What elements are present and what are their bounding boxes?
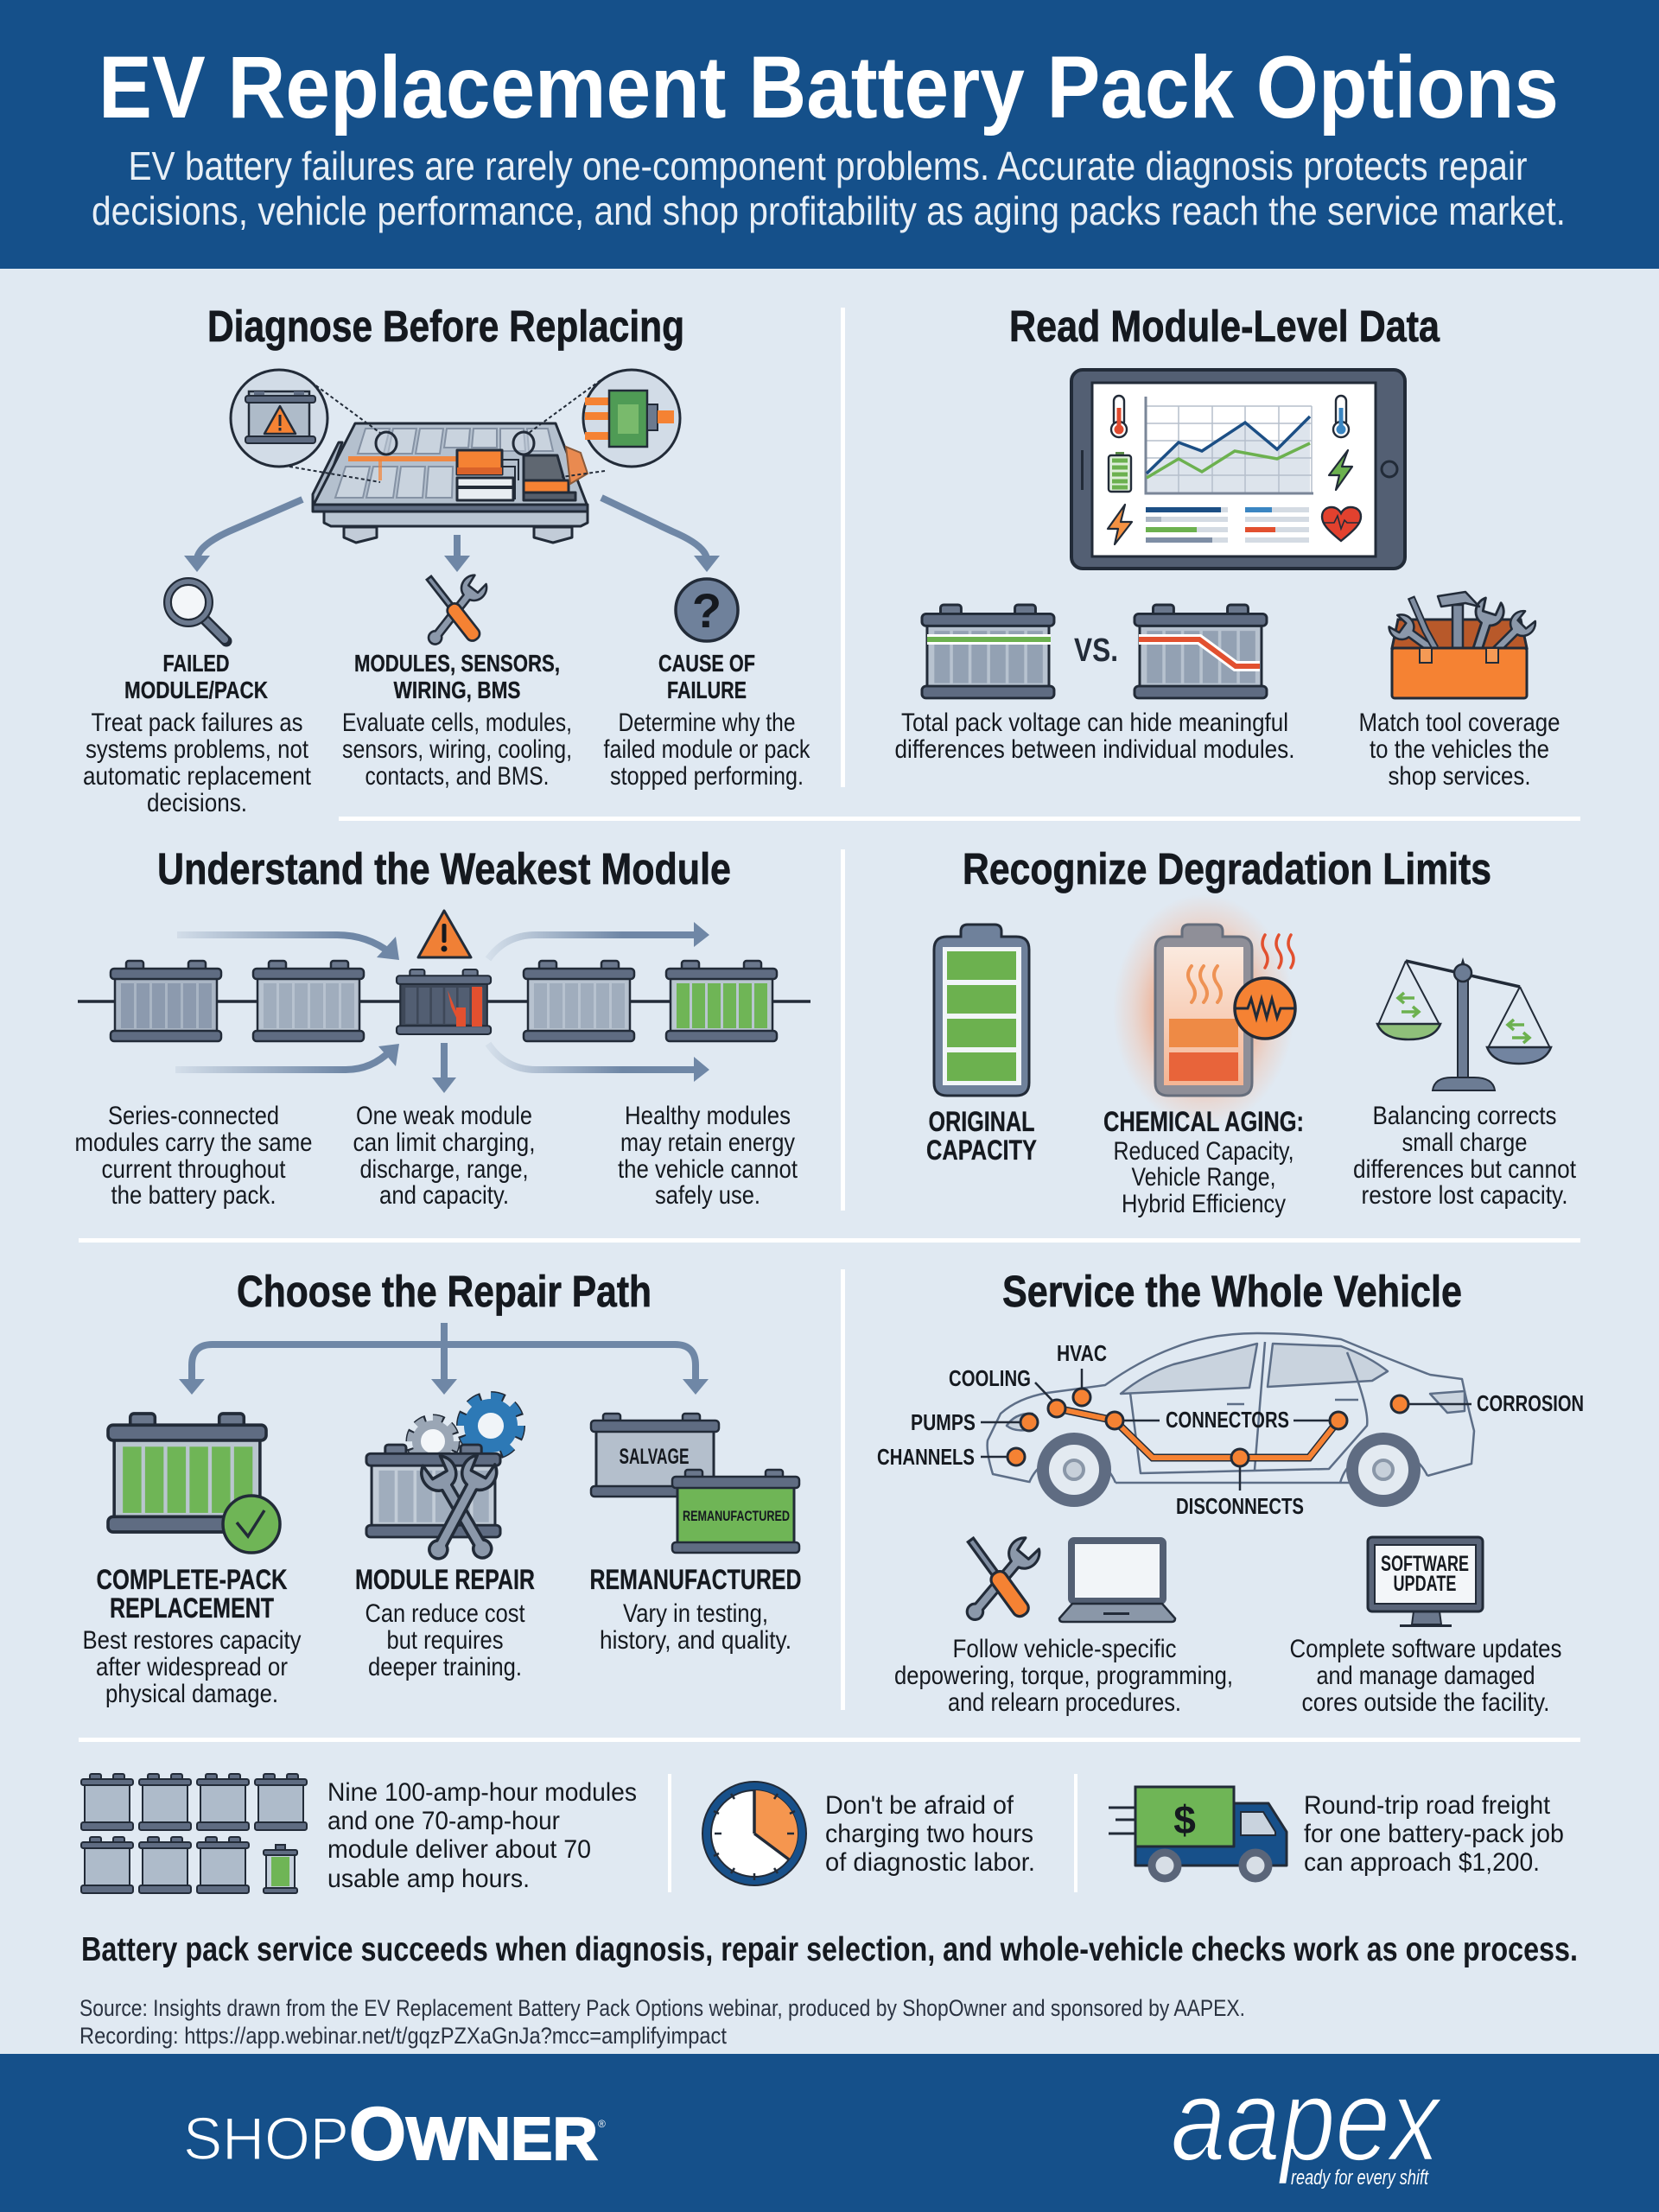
text: remanufactured: Vary in testing,	[623, 1599, 768, 1628]
text: vehicle-specific procedures: depowering, torque, programming,	[894, 1662, 1233, 1690]
text: pack voltage: differences between individual modules.	[895, 735, 1294, 764]
text: vehicle-specific procedures: and relearn procedures.	[948, 1688, 1181, 1717]
text: complete-pack replacement: REPLACEMENT	[110, 1592, 274, 1624]
icon: laptop	[1059, 1541, 1175, 1622]
text: chemical aging	[1103, 1106, 1304, 1218]
text: balancing: small charge	[1402, 1128, 1528, 1157]
weak module	[397, 969, 491, 1034]
item: cause of failure: failed module or pack	[603, 735, 810, 764]
text: chemical aging: Hybrid Efficiency	[1122, 1190, 1286, 1218]
text: software updates	[1289, 1635, 1562, 1717]
heading: weakest module: Understand the Weakest Module	[157, 844, 731, 893]
icon: complete replacement battery with check	[108, 1414, 280, 1553]
item: failed module/pack: decisions.	[147, 789, 247, 817]
icon: freight truck: $	[1173, 1797, 1196, 1842]
logo: shopowner	[183, 2093, 606, 2176]
icon: module repair	[366, 1397, 519, 1566]
text: healthy modules: Healthy modules	[625, 1102, 791, 1130]
text: diagnostic labor	[825, 1791, 1035, 1877]
item: cause of failure: FAILURE	[667, 677, 747, 703]
icon: software update monitor: SOFTWARE	[1381, 1552, 1469, 1576]
text: diagnostic labor: Don't be afraid of	[825, 1791, 1014, 1820]
icon: salvage and remanufactured batteries: REMANUFACTURED	[683, 1508, 790, 1524]
text: series-connected: Series-connected	[108, 1102, 279, 1130]
callout labels	[877, 1340, 1584, 1519]
icon: clock	[702, 1782, 806, 1885]
panel: read module-level data	[895, 302, 1560, 791]
text: module repair: deeper training.	[368, 1653, 522, 1681]
item: failed module/pack: FAILED	[162, 650, 230, 677]
item: modules, sensors, wiring, bms: WIRING, BMS	[394, 677, 520, 703]
icon: crossed tools	[422, 572, 490, 651]
panel: diagnose before replacing	[83, 302, 810, 817]
car body	[988, 1333, 1474, 1483]
footer band	[0, 2054, 1659, 2212]
callout labels: PUMPS	[911, 1409, 976, 1435]
heading: whole vehicle: Service the Whole Vehicle	[1002, 1267, 1462, 1316]
text: road freight: can approach $1,200.	[1304, 1848, 1540, 1877]
icon: heart	[1322, 507, 1361, 541]
item: failed module/pack: automatic replacement	[83, 762, 312, 791]
text: healthy modules: the vehicle cannot	[618, 1155, 798, 1184]
text: complete-pack replacement: after widespread or	[96, 1653, 288, 1681]
text: series-connected: current throughout	[102, 1155, 286, 1184]
text: one weak module: can limit charging,	[353, 1128, 536, 1157]
subtitle	[92, 143, 1566, 233]
source note: Source: Insights drawn from the EV Replacement Battery Pack Options webinar, produced by ShopOwner and sponsored by AAPEX.	[79, 1995, 1245, 2021]
text: complete-pack replacement: COMPLETE-PACK	[97, 1564, 287, 1595]
icon: software update monitor: UPDATE	[1393, 1572, 1457, 1596]
text: road freight: Round-trip road freight	[1304, 1791, 1551, 1820]
callout labels: COOLING	[949, 1365, 1031, 1391]
current flow arrows	[175, 922, 709, 1093]
leader lines	[981, 1369, 1471, 1491]
text: module repair	[355, 1564, 535, 1681]
text: usable amp hours: Nine 100-amp-hour modules	[327, 1778, 637, 1807]
icon: toolbox	[1386, 592, 1539, 698]
logo: aapex: aapex	[1171, 2055, 1443, 2185]
text: remanufactured: history, and quality.	[600, 1626, 791, 1655]
icon: blue thermometer	[1333, 396, 1349, 437]
text: remanufactured	[589, 1564, 802, 1655]
battery pack illustration	[231, 370, 680, 543]
gray modules and green module	[111, 961, 777, 1041]
text: tool coverage	[1358, 709, 1560, 791]
callout labels: HVAC	[1057, 1340, 1107, 1366]
source note	[79, 1995, 1245, 2049]
text: one weak module: One weak module	[356, 1102, 532, 1130]
text: one weak module	[353, 1102, 536, 1210]
text: series-connected: the battery pack.	[111, 1181, 276, 1210]
header band	[0, 0, 1659, 269]
text: healthy modules: may retain energy	[620, 1128, 795, 1157]
label: original capacity: ORIGINAL	[928, 1106, 1035, 1137]
item: failed module/pack: systems problems, not	[86, 735, 309, 764]
label: original capacity: CAPACITY	[926, 1135, 1037, 1166]
title: EV Replacement Battery Pack Options	[99, 38, 1559, 137]
text: series-connected: modules carry the same	[74, 1128, 313, 1157]
logo: shopowner: O	[349, 2093, 406, 2176]
source note: Recording: https://app.webinar.net/t/gqzPZXaGnJa?mcc=amplifyimpact	[79, 2023, 727, 2049]
text: software updates: cores outside the facility.	[1301, 1688, 1550, 1717]
item: failed module/pack: Treat pack failures as	[92, 709, 302, 737]
tablet dashboard	[1071, 370, 1405, 569]
item: cause of failure: stopped performing.	[610, 762, 804, 791]
icon: salvage and remanufactured batteries	[591, 1414, 799, 1553]
text: tool coverage: shop services.	[1388, 762, 1531, 791]
icon: warning triangle	[418, 911, 471, 957]
logo: shopowner: ®	[598, 2118, 606, 2130]
text: usable amp hours: usable amp hours.	[327, 1865, 530, 1893]
icon: full battery	[934, 925, 1029, 1096]
logo: shopowner: WNER	[406, 2105, 598, 2172]
text: diagnostic labor: charging two hours	[825, 1820, 1033, 1848]
icon: question mark: ?	[692, 583, 721, 638]
text: balancing: Balancing corrects	[1372, 1102, 1557, 1130]
callout labels: CORROSION	[1477, 1390, 1584, 1416]
heading: diagnose: Diagnose Before Replacing	[207, 302, 684, 351]
line chart	[1146, 397, 1313, 493]
item: modules, sensors, wiring, bms: MODULES, SENSORS,	[354, 650, 560, 677]
icon: crossed tools	[958, 1534, 1044, 1627]
text: road freight: for one battery-pack job	[1304, 1820, 1564, 1848]
icon: battery with even voltage	[922, 605, 1054, 698]
text: tool coverage: Match tool coverage	[1358, 709, 1560, 737]
text: balancing: restore lost capacity.	[1362, 1181, 1567, 1210]
label: original capacity	[926, 1106, 1037, 1166]
text: chemical aging: Vehicle Range,	[1132, 1163, 1275, 1192]
text: usable amp hours: module deliver about 70	[327, 1835, 591, 1864]
icon: freight truck	[1109, 1787, 1287, 1878]
panel: service the whole vehicle	[877, 1267, 1584, 1717]
item: modules, sensors, wiring, bms: sensors, wiring, cooling,	[342, 735, 572, 764]
text: balancing: differences but cannot	[1353, 1155, 1577, 1184]
text: usable amp hours	[327, 1778, 637, 1893]
item: failed module/pack: MODULE/PACK	[124, 677, 268, 703]
text: chemical aging: Reduced Capacity,	[1113, 1137, 1294, 1166]
text: vehicle-specific procedures: Follow vehicle-specific	[952, 1635, 1177, 1663]
logo: shopowner: SHOP	[183, 2105, 349, 2172]
text: balancing	[1353, 1102, 1577, 1210]
heading: module data: Read Module-Level Data	[1009, 302, 1440, 351]
icon: aged hot battery	[1113, 894, 1295, 1128]
callout labels: DISCONNECTS	[1176, 1493, 1304, 1519]
arrows from pack	[184, 498, 720, 572]
text: complete-pack replacement	[83, 1564, 301, 1708]
text: vehicle-specific procedures	[894, 1635, 1233, 1717]
text: software updates: Complete software updates	[1289, 1635, 1562, 1663]
callout labels: CONNECTORS	[1166, 1407, 1289, 1433]
text: tool coverage: to the vehicles the	[1370, 735, 1549, 764]
text: complete-pack replacement: Best restores capacity	[83, 1626, 301, 1655]
icon: green battery	[1109, 452, 1131, 492]
text: chemical aging: CHEMICAL AGING:	[1103, 1106, 1304, 1137]
label: vs: VS.	[1074, 632, 1118, 669]
text: complete-pack replacement: physical damage.	[105, 1680, 278, 1708]
text: healthy modules	[618, 1102, 798, 1210]
item: modules, sensors, wiring, bms	[342, 650, 572, 791]
branching arrows	[179, 1323, 709, 1395]
text: diagnostic labor: of diagnostic labor.	[825, 1848, 1035, 1877]
icon: software update monitor	[1368, 1537, 1483, 1627]
item: modules, sensors, wiring, bms: Evaluate cells, modules,	[342, 709, 572, 737]
panel: choose the repair path	[83, 1267, 802, 1708]
car diagram	[877, 1333, 1584, 1519]
callout labels: CHANNELS	[877, 1444, 975, 1470]
heading: degradation: Recognize Degradation Limits	[963, 844, 1491, 893]
item: cause of failure	[603, 650, 810, 791]
icon: balance scale	[1377, 957, 1551, 1090]
panel: understand the weakest module	[74, 844, 810, 1210]
text: pack voltage	[895, 709, 1294, 764]
icon: magnified failed module	[231, 370, 327, 467]
icon: orange bolt	[1108, 505, 1132, 544]
icon: magnified circuit board	[583, 370, 680, 467]
item: failed module/pack	[83, 650, 312, 817]
heading: repair path: Choose the Repair Path	[237, 1267, 652, 1316]
item: cause of failure: Determine why the	[619, 709, 795, 737]
item: modules, sensors, wiring, bms: contacts, and BMS.	[365, 762, 550, 791]
text: software updates: and manage damaged	[1317, 1662, 1535, 1690]
text: one weak module: and capacity.	[379, 1181, 509, 1210]
text: module repair: MODULE REPAIR	[355, 1564, 535, 1595]
data bars	[1146, 507, 1309, 543]
text: road freight	[1304, 1791, 1564, 1877]
text: series-connected	[74, 1102, 313, 1210]
icon: magnifying glass	[168, 582, 226, 641]
icon: battery with voltage drop	[1135, 605, 1267, 698]
icon: red thermometer	[1111, 396, 1127, 437]
text: healthy modules: safely use.	[655, 1181, 760, 1210]
text: one weak module: discharge, range,	[359, 1155, 529, 1184]
high voltage route	[1057, 1408, 1338, 1458]
item: cause of failure: CAUSE OF	[658, 650, 755, 677]
icon: salvage and remanufactured batteries: SALVAGE	[619, 1445, 690, 1469]
icon: nine plus one modules	[81, 1774, 307, 1893]
text: remanufactured: REMANUFACTURED	[589, 1564, 802, 1595]
wheels	[1043, 1439, 1414, 1501]
logo: aapex: ready for every shift	[1291, 2166, 1429, 2190]
text: module repair: Can reduce cost	[365, 1599, 525, 1628]
icon: question mark	[676, 579, 738, 641]
stat strip	[81, 1774, 1564, 1893]
panel: recognize degradation limits	[926, 844, 1577, 1218]
service points	[1007, 1389, 1408, 1466]
text: usable amp hours: and one 70-amp-hour	[327, 1807, 560, 1835]
series wire	[78, 1000, 810, 1003]
text: module repair: but requires	[387, 1626, 503, 1655]
text: pack voltage: Total pack voltage can hide meaningful	[901, 709, 1288, 737]
icon: green bolt	[1329, 450, 1352, 490]
